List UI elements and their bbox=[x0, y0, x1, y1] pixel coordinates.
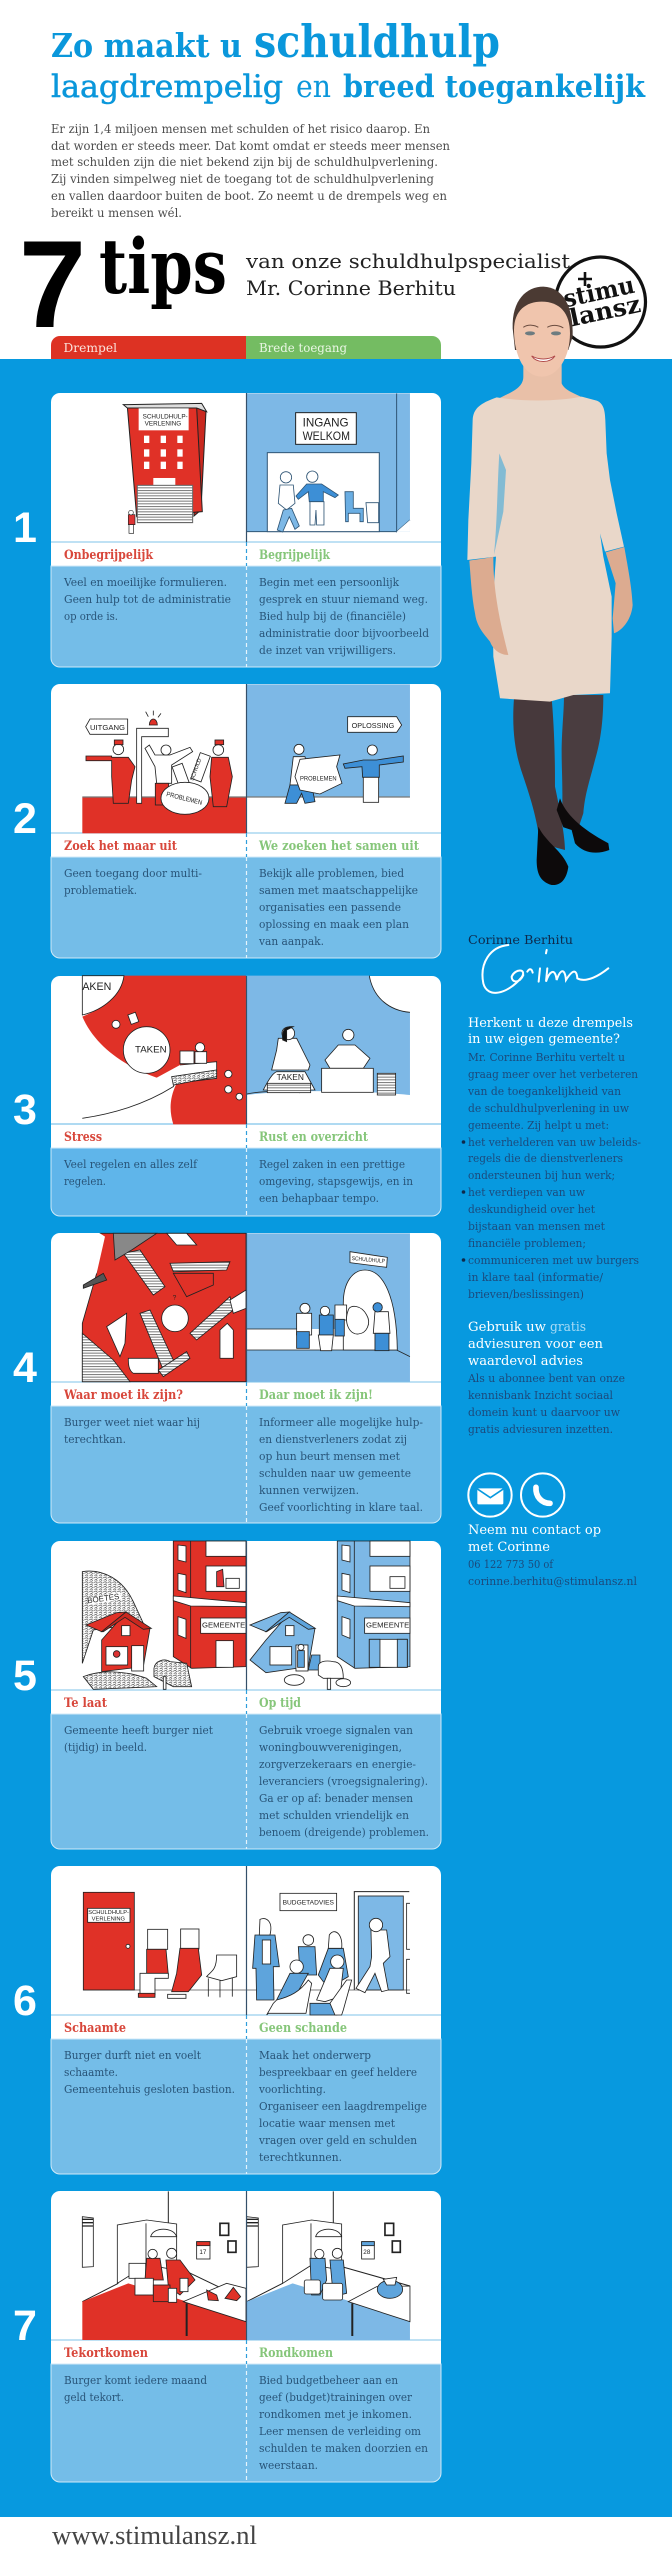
heading: 7 tips bbox=[19, 216, 227, 354]
right text: Daar moet ik zijn!: en dienstverleners zodat zij bbox=[259, 1432, 407, 1446]
illustration: rolling boulder of tasks: TAKEN bbox=[135, 1045, 167, 1055]
caption: name and signature bbox=[468, 932, 608, 993]
right text: Begrijpelijk: Begrijpelijk bbox=[259, 548, 331, 563]
illustration: waiting room with bags on heads bbox=[83, 1892, 246, 1998]
right text: We zoeken het samen uit: We zoeken het samen uit bbox=[258, 839, 419, 854]
right text: Geen schande: locatie waar mensen met bbox=[259, 2116, 395, 2130]
right text: Op tijd: Ga er op af: benader mensen bbox=[259, 1791, 414, 1805]
right text: We zoeken het samen uit: Bekijk alle problemen, bied bbox=[259, 866, 405, 880]
right text: Geen schande: Organiseer een laagdrempelige bbox=[259, 2099, 427, 2113]
left text: Onbegrijpelijk: op orde is. bbox=[64, 609, 118, 623]
illustration: house under fines: GEMEENTE bbox=[202, 1621, 245, 1630]
right text: Begrijpelijk: administratie door bijvoorbeeld bbox=[259, 626, 430, 640]
illustration: maze of stairs: ? bbox=[173, 1294, 177, 1301]
left text: Zoek het maar uit bbox=[64, 839, 202, 897]
left text: Stress: regelen. bbox=[64, 1174, 106, 1188]
illustration: calm sorting of tasks: TAKEN bbox=[277, 1073, 304, 1082]
intro text: dat worden er steeds meer. Dat komt omdat er steeds meer mensen bbox=[51, 138, 450, 153]
sidebar: gratis adviesuren: Als u abonnee bent van onze bbox=[467, 1371, 625, 1385]
legend bar: Brede toegang bbox=[259, 340, 347, 355]
right text: We zoeken het samen uit: oplossing en maak een plan bbox=[259, 917, 410, 931]
right text: Rondkomen: rondkomen met je inkomen. bbox=[259, 2407, 412, 2421]
right text: Begrijpelijk: Begin met een persoonlijk bbox=[259, 575, 400, 589]
illustration: rolling boulder of tasks: AKEN bbox=[82, 981, 111, 993]
left text: Te laat bbox=[64, 1696, 213, 1754]
left text: Te laat: (tijdig) in beeld. bbox=[64, 1740, 147, 1754]
illustration: guards and exit: PROBLEMEN bbox=[165, 791, 203, 807]
right text: Daar moet ik zijn!: Geef voorlichting in klare taal. bbox=[259, 1500, 423, 1514]
panel: tip 6 bbox=[13, 1866, 441, 2174]
sidebar: drempels in uw gemeente: regels die de dienstverleners bbox=[468, 1151, 623, 1165]
left text: Schaamte: Burger durft niet en voelt bbox=[64, 2048, 201, 2062]
sidebar: drempels in uw gemeente: in uw eigen gemeente? bbox=[468, 1032, 620, 1047]
sidebar: contact: Neem nu contact op bbox=[468, 1523, 601, 1538]
right text: Begrijpelijk: de inzet van vrijwilligers. bbox=[259, 643, 396, 657]
left text: Onbegrijpelijk: Onbegrijpelijk bbox=[64, 548, 154, 563]
illustration: waiting room with bags on heads: SCHULDHULP- bbox=[88, 1910, 129, 1916]
heading: 7 tips: tips bbox=[99, 222, 227, 311]
number 4: 4 bbox=[13, 1344, 37, 1392]
divider bbox=[246, 1233, 248, 1382]
photo: Corinne Berhitu bbox=[467, 287, 633, 885]
panel: tip 5 bbox=[13, 1541, 441, 1849]
number 6: 6 bbox=[13, 1977, 37, 2025]
number 2: 2 bbox=[13, 795, 37, 843]
sidebar: drempels in uw gemeente: financiële problemen; bbox=[468, 1236, 586, 1250]
left text: Waar moet ik zijn? bbox=[63, 1388, 200, 1446]
illustration: maze of stairs bbox=[82, 1233, 246, 1382]
divider bbox=[246, 1541, 248, 1690]
sidebar: drempels in uw gemeente: de schuldhulpverlening in uw bbox=[468, 1101, 629, 1115]
illustration: calm sorting of tasks bbox=[247, 976, 410, 1095]
left text: Waar moet ik zijn?: Waar moet ik zijn? bbox=[63, 1388, 183, 1403]
illustration: buried office: VERLENING bbox=[145, 421, 181, 428]
right text: We zoeken het samen uit bbox=[258, 839, 419, 948]
sidebar: gratis adviesuren bbox=[467, 1320, 625, 1436]
left text: Schaamte: Gemeentehuis gesloten bastion. bbox=[64, 2082, 235, 2096]
right text: Geen schande: vragen over geld en schulden bbox=[258, 2133, 418, 2147]
left text: Tekortkomen: Tekortkomen bbox=[64, 2346, 148, 2361]
sidebar: drempels in uw gemeente: gemeente. Zij helpt u met: bbox=[468, 1118, 609, 1132]
left text: Onbegrijpelijk: Geen hulp tot de administratie bbox=[64, 592, 231, 606]
number 7: 7 bbox=[13, 2302, 37, 2350]
sidebar: gratis adviesuren: kennisbank Inzicht sociaal bbox=[468, 1388, 613, 1402]
illustration: balanced budget couple: 28 bbox=[363, 2249, 371, 2256]
illustration: solving together: PROBLEMEN bbox=[300, 776, 337, 783]
illustration: rolling boulder of tasks bbox=[82, 976, 246, 1124]
sidebar: gratis adviesuren: adviesuren voor een bbox=[468, 1337, 604, 1352]
right text: Rust en overzicht: een behapbaar tempo. bbox=[259, 1191, 379, 1205]
left text: Waar moet ik zijn?: Burger weet niet waar hij bbox=[64, 1415, 200, 1429]
sidebar: contact: 06 122 773 50 of bbox=[468, 1557, 554, 1571]
divider bbox=[246, 684, 248, 833]
illustration: overspending couple bbox=[82, 2191, 246, 2340]
illustration: buried office: SCHULDHULP- bbox=[143, 414, 188, 421]
illustration: clear signpost to help: SCHULDHULP bbox=[351, 1256, 385, 1265]
illustration: solving together bbox=[247, 684, 410, 803]
panel: tip 2 bbox=[13, 684, 441, 958]
number 1: 1 bbox=[13, 504, 37, 552]
right text: Rust en overzicht bbox=[259, 1130, 414, 1205]
left text: Waar moet ik zijn?: terechtkan. bbox=[64, 1432, 126, 1446]
right text: We zoeken het samen uit: organisaties een passende bbox=[259, 900, 401, 914]
right text: Op tijd: Op tijd bbox=[259, 1696, 301, 1711]
left text: Onbegrijpelijk: Veel en moeilijke formulieren. bbox=[63, 575, 227, 589]
sidebar: drempels in uw gemeente: ondersteunen bij hun werk; bbox=[468, 1168, 615, 1182]
title: laagdrempelig bbox=[51, 69, 283, 105]
sidebar: drempels in uw gemeente: deskundigheid over het bbox=[468, 1202, 595, 1216]
left text: Zoek het maar uit: Zoek het maar uit bbox=[64, 839, 177, 854]
right text: Op tijd bbox=[259, 1696, 429, 1839]
illustration: early signals bbox=[250, 1541, 410, 1689]
sidebar: contact bbox=[468, 1523, 637, 1588]
right text: Rondkomen: weerstaan. bbox=[259, 2458, 318, 2472]
title: breed toegankelijk bbox=[343, 69, 646, 105]
number 5: 5 bbox=[13, 1652, 37, 1700]
right text: Rondkomen: Rondkomen bbox=[259, 2346, 333, 2361]
sidebar: gratis adviesuren: domein kunt u daarvoor uw bbox=[468, 1405, 620, 1419]
illustration: welcoming entrance: INGANG bbox=[303, 416, 349, 430]
right text: Daar moet ik zijn!: schulden naar uw gemeente bbox=[259, 1466, 411, 1480]
illustration: early signals: GEMEENTE bbox=[366, 1621, 409, 1630]
right text: Geen schande: Geen schande bbox=[259, 2021, 347, 2036]
right text: Op tijd: zorgverzekeraars en energie- bbox=[259, 1757, 416, 1771]
right text: We zoeken het samen uit: samen met maatschappelijke bbox=[259, 883, 418, 897]
intro text: met schulden zijn die niet bekend zijn bij de schuldhulpverlening. bbox=[51, 154, 438, 169]
right text: Rondkomen: Bied budgetbeheer aan en bbox=[259, 2373, 399, 2387]
right text: Daar moet ik zijn!: Informeer alle mogelijke hulp- bbox=[259, 1415, 423, 1429]
illustration: open conversation group: BUDGETADVIES bbox=[283, 1900, 334, 1907]
title: en bbox=[296, 69, 331, 105]
sidebar: gratis adviesuren: waardevol advies bbox=[468, 1354, 583, 1369]
sidebar: drempels in uw gemeente: het verdiepen van uw bbox=[468, 1185, 585, 1199]
sidebar: gratis adviesuren: gratis bbox=[550, 1320, 586, 1335]
sidebar: drempels in uw gemeente: communiceren met uw burgers bbox=[468, 1253, 639, 1267]
sidebar: drempels in uw gemeente: het verhelderen van uw beleids- bbox=[468, 1135, 641, 1149]
right text: Daar moet ik zijn! bbox=[259, 1388, 423, 1514]
title: Zo maakt u bbox=[51, 26, 242, 65]
right text: Rondkomen bbox=[259, 2346, 429, 2472]
sidebar: drempels in uw gemeente: brieven/beslissingen) bbox=[468, 1287, 584, 1301]
sidebar: contact: corinne.berhitu@stimulansz.nl bbox=[468, 1574, 637, 1588]
divider bbox=[246, 393, 248, 542]
left text: Zoek het maar uit: problematiek. bbox=[64, 883, 137, 897]
sidebar: contact: met Corinne bbox=[468, 1540, 550, 1555]
divider bbox=[246, 976, 248, 1124]
right text: Daar moet ik zijn!: op hun beurt mensen met bbox=[259, 1449, 400, 1463]
illustration: welcoming entrance bbox=[246, 393, 410, 532]
right text: Rust en overzicht: Rust en overzicht bbox=[259, 1130, 368, 1145]
panel: tip 3 bbox=[13, 976, 441, 1216]
heading: 7 tips: 7 bbox=[19, 216, 86, 354]
subtitle: Mr. Corinne Berhitu bbox=[246, 276, 456, 300]
intro text: en vallen daardoor buiten de boot. Zo neemt u de drempels weg en bbox=[51, 188, 447, 203]
right text: Daar moet ik zijn!: kunnen verwijzen. bbox=[259, 1483, 359, 1497]
left text: Te laat: Te laat bbox=[64, 1696, 107, 1711]
left text: Tekortkomen: geld tekort. bbox=[64, 2390, 124, 2404]
right text: Begrijpelijk: gesprek en stuur niemand weg. bbox=[259, 592, 428, 606]
divider bbox=[246, 1866, 248, 2015]
sidebar: drempels in uw gemeente: Herkent u deze drempels bbox=[468, 1016, 633, 1031]
intro text: Zij vinden simpelweg niet de toegang tot de schuldhulpverlening bbox=[51, 171, 434, 186]
right text: We zoeken het samen uit: van aanpak. bbox=[258, 934, 324, 948]
divider bbox=[246, 2191, 248, 2340]
logo: stimulansz: stimu bbox=[561, 270, 637, 313]
illustration: waiting room with bags on heads: VERLENING bbox=[92, 1916, 125, 1922]
right text: Geen schande bbox=[258, 2021, 427, 2164]
logo: stimulansz bbox=[556, 257, 646, 347]
right text: Op tijd: met schulden vriendelijk en bbox=[259, 1808, 410, 1822]
right text: Op tijd: woningbouwverenigingen, bbox=[259, 1740, 402, 1754]
subtitle: van onze schuldhulpspecialist bbox=[245, 249, 570, 273]
intro text bbox=[51, 121, 450, 220]
left text: Schaamte: Schaamte bbox=[64, 2021, 126, 2036]
subtitle bbox=[245, 249, 570, 300]
right text: Geen schande: voorlichting. bbox=[258, 2082, 326, 2096]
right text: Geen schande: terechtkunnen. bbox=[259, 2150, 342, 2164]
sidebar: drempels in uw gemeente: van de toegankelijkheid van bbox=[467, 1084, 622, 1098]
right text: Begrijpelijk bbox=[259, 548, 430, 657]
right text: Daar moet ik zijn!: Daar moet ik zijn! bbox=[259, 1388, 373, 1403]
title bbox=[51, 15, 646, 105]
logo: stimulansz: lansz bbox=[567, 289, 643, 332]
sidebar: drempels in uw gemeente: Mr. Corinne Berhitu vertelt u bbox=[468, 1050, 625, 1064]
right text: Rust en overzicht: Regel zaken in een prettige bbox=[259, 1157, 405, 1171]
title: schuldhulp bbox=[254, 15, 500, 68]
legend bar: Drempel bbox=[64, 340, 117, 355]
left text: Tekortkomen bbox=[64, 2346, 208, 2404]
icon: envelope bbox=[468, 1473, 512, 1517]
illustration: guards and exit: UITGANG bbox=[90, 723, 125, 732]
left text: Zoek het maar uit: Geen toegang door multi- bbox=[64, 866, 202, 880]
right text: Rondkomen: Leer mensen de verleiding om bbox=[259, 2424, 421, 2438]
right text: Op tijd: benoem (dreigende) problemen. bbox=[259, 1825, 429, 1839]
illustration: house under fines bbox=[82, 1541, 246, 1689]
sidebar: drempels in uw gemeente: bijstaan van mensen met bbox=[468, 1219, 605, 1233]
sidebar: gratis adviesuren: Gebruik uw bbox=[468, 1320, 546, 1335]
panel: tip 1 bbox=[13, 393, 441, 667]
intro text: bereikt u mensen wél. bbox=[51, 205, 182, 220]
illustration: balanced budget couple bbox=[247, 2191, 410, 2340]
number 3: 3 bbox=[13, 1086, 37, 1134]
left text: Schaamte: schaamte. bbox=[64, 2065, 118, 2079]
left text: Onbegrijpelijk bbox=[63, 548, 231, 623]
left text: Schaamte bbox=[64, 2021, 235, 2096]
right text: Geen schande: Maak het onderwerp bbox=[259, 2048, 371, 2062]
illustration: overspending couple: 17 bbox=[199, 2249, 207, 2256]
left text: Stress: Stress bbox=[64, 1130, 102, 1145]
illustration: house under fines: BOETES bbox=[87, 1592, 120, 1605]
right text: Begrijpelijk: Bied hulp bij de (financiële) bbox=[259, 609, 406, 623]
illustration: buried office bbox=[123, 403, 207, 533]
right text: Rondkomen: schulden te maken doorzien en bbox=[259, 2441, 429, 2455]
sidebar: drempels in uw gemeente bbox=[462, 1016, 641, 1301]
intro text: Er zijn 1,4 miljoen mensen met schulden of het risico daarop. En bbox=[51, 121, 430, 136]
right text: Rust en overzicht: omgeving, stapsgewijs, en in bbox=[259, 1174, 414, 1188]
right text: Geen schande: bespreekbaar en geef heldere bbox=[259, 2065, 417, 2079]
panel: tip 4 bbox=[13, 1233, 441, 1523]
left text: Tekortkomen: Burger komt iedere maand bbox=[64, 2373, 208, 2387]
illustration: guards and exit bbox=[82, 711, 246, 833]
sidebar: gratis adviesuren: gratis adviesuren inzetten. bbox=[468, 1422, 613, 1436]
illustration: solving together: OPLOSSING bbox=[352, 721, 394, 730]
illustration: open conversation group bbox=[247, 1892, 410, 2015]
illustration: welcoming entrance: WELKOM bbox=[303, 429, 350, 443]
icon: phone bbox=[521, 1473, 564, 1517]
panel: tip 7 bbox=[13, 2191, 441, 2482]
footer url: www.stimulansz.nl bbox=[52, 2521, 257, 2550]
right text: Rondkomen: geef (budget)trainingen over bbox=[259, 2390, 412, 2404]
caption: name and signature: Corinne Berhitu bbox=[468, 932, 573, 947]
illustration: clear signpost to help bbox=[247, 1233, 410, 1382]
illustration: guards and exit: SCHULD bbox=[190, 758, 203, 782]
right text: Op tijd: leveranciers (vroegsignalering). bbox=[259, 1774, 428, 1788]
left text: Stress bbox=[63, 1130, 198, 1188]
left text: Stress: Veel regelen en alles zelf bbox=[63, 1157, 198, 1171]
legend bar bbox=[51, 336, 441, 363]
right text: Op tijd: Gebruik vroege signalen van bbox=[259, 1723, 414, 1737]
sidebar: drempels in uw gemeente: in klare taal (informatie/ bbox=[468, 1270, 603, 1284]
sidebar: drempels in uw gemeente: graag meer over het verbeteren bbox=[468, 1067, 639, 1081]
left text: Te laat: Gemeente heeft burger niet bbox=[64, 1723, 213, 1737]
